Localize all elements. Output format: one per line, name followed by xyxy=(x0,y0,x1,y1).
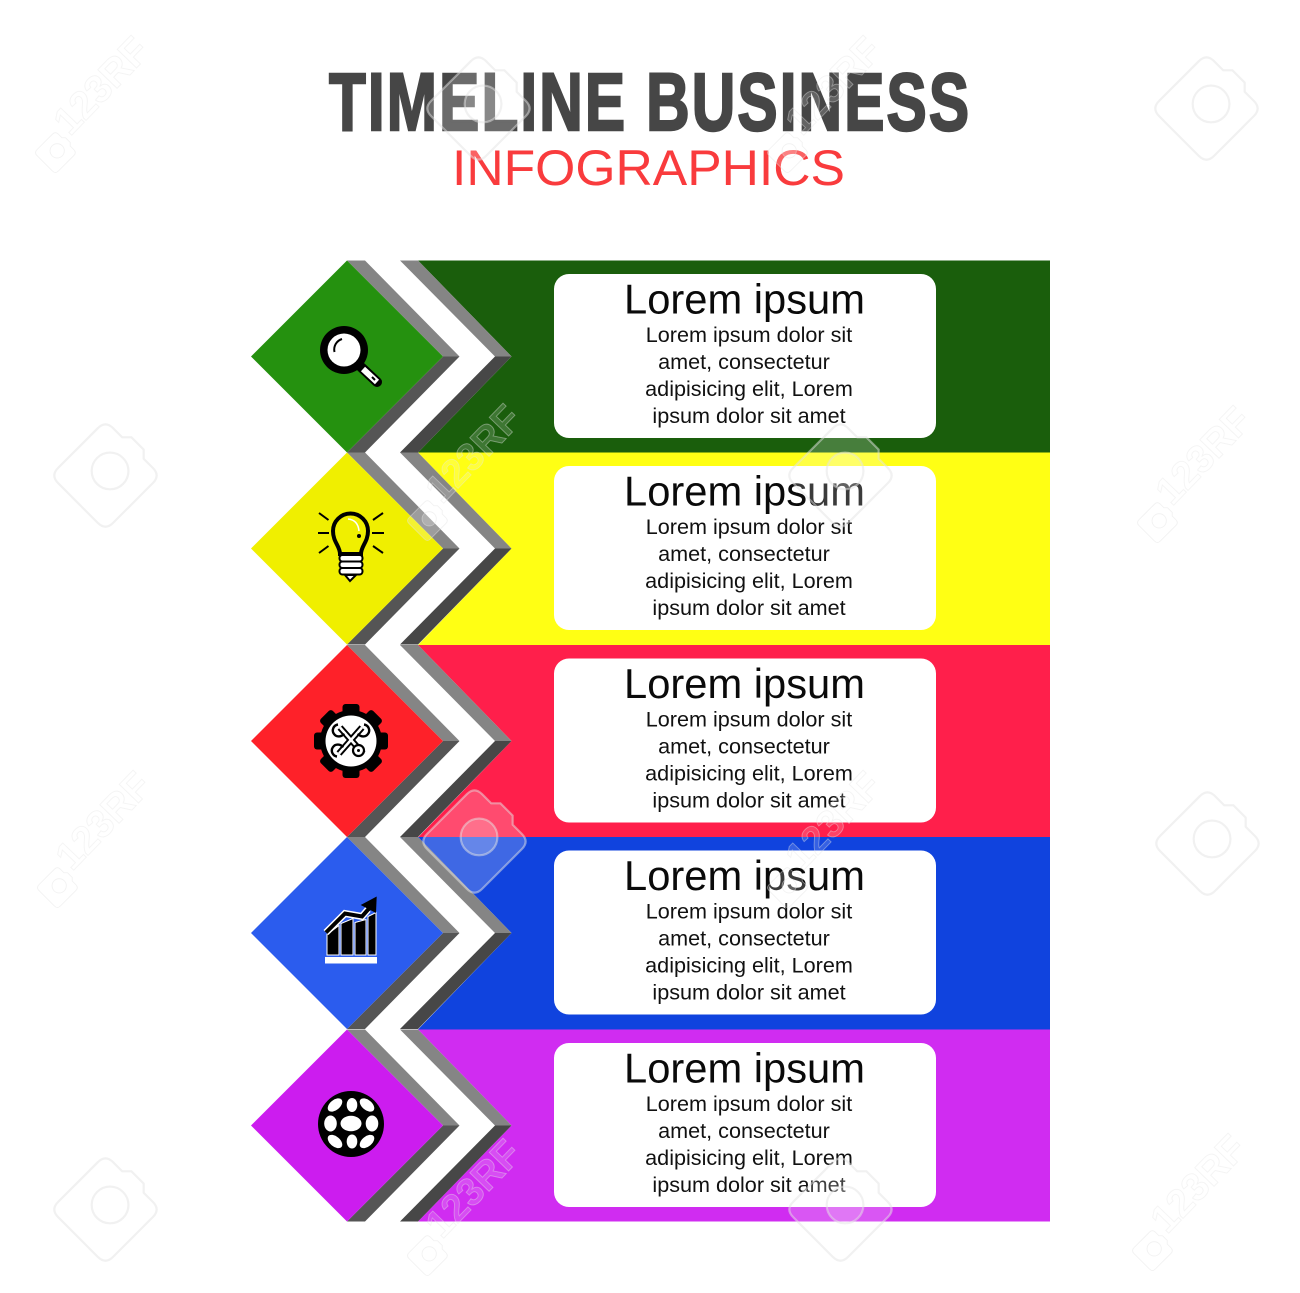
watermarks: 123RF xyxy=(1143,1127,1255,1241)
text box: Lorem ipsum xyxy=(624,468,865,514)
watermarks: 123RF xyxy=(48,764,160,878)
outer chevron xyxy=(400,452,512,644)
icon: growth chart xyxy=(325,896,377,964)
icon: dotted globe xyxy=(318,1091,384,1157)
text box: Lorem ipsum xyxy=(624,660,865,707)
text box: Lorem ipsum xyxy=(624,1044,865,1092)
watermarks: 123RF xyxy=(778,764,890,878)
text box: Lorem ipsum dolor sit xyxy=(646,322,852,347)
timeline step 5: purple xyxy=(251,1030,1050,1222)
watermarks: 123RF xyxy=(778,29,890,143)
timeline step 1: green xyxy=(251,260,1050,452)
bar xyxy=(418,452,1050,645)
inner chevron xyxy=(347,452,460,644)
inner chevron xyxy=(347,260,460,452)
outer chevron xyxy=(400,1030,512,1222)
watermarks: 123RF xyxy=(46,29,158,143)
text box: Lorem ipsum dolor sit xyxy=(646,898,852,924)
text box: ipsum dolor sit amet xyxy=(652,403,846,428)
text box: Lorem ipsum dolor sit xyxy=(646,514,852,539)
bar xyxy=(418,260,1050,452)
text box: Lorem ipsum xyxy=(624,276,865,322)
text box: adipisicing elit, Lorem xyxy=(645,952,853,978)
text box: ipsum dolor sit amet xyxy=(652,980,846,1004)
diamond xyxy=(251,837,443,1029)
heading: timeline business: TIMELINE BUSINESS xyxy=(329,57,971,148)
diamond xyxy=(251,1030,443,1222)
timeline step 3: red xyxy=(251,645,1050,838)
text box: Lorem ipsum dolor sit xyxy=(646,1091,852,1116)
outer chevron xyxy=(400,837,512,1029)
text box: amet, consectetur xyxy=(658,349,830,374)
inner chevron xyxy=(347,645,460,837)
diamond xyxy=(251,645,443,837)
title xyxy=(329,57,971,196)
text box xyxy=(554,658,936,822)
text box xyxy=(554,274,936,438)
text box: amet, consectetur xyxy=(658,541,830,566)
icon: light bulb xyxy=(318,513,384,581)
inner chevron xyxy=(347,1030,460,1222)
text box xyxy=(554,850,936,1014)
watermarks: 123RF xyxy=(418,397,530,511)
text box: Lorem ipsum dolor sit xyxy=(646,706,852,732)
icon: magnifying glass xyxy=(320,326,377,382)
timeline step 4: blue xyxy=(251,837,1050,1030)
bar xyxy=(418,645,1050,838)
icon: gear with crossed wrenches xyxy=(314,704,388,778)
text box xyxy=(554,466,936,630)
watermarks: 123RF xyxy=(418,1132,530,1246)
text box: ipsum dolor sit amet xyxy=(652,595,846,620)
diamond xyxy=(251,452,443,644)
text box: amet, consectetur xyxy=(658,926,830,950)
text box: ipsum dolor sit amet xyxy=(652,1172,846,1197)
outer chevron xyxy=(400,260,512,452)
text box: adipisicing elit, Lorem xyxy=(645,760,853,786)
subheading: infographics: INFOGRAPHICS xyxy=(452,139,845,196)
text box: amet, consectetur xyxy=(658,734,830,758)
text box: amet, consectetur xyxy=(658,1118,830,1143)
text box: Lorem ipsum xyxy=(624,852,865,899)
diamond xyxy=(251,260,443,452)
watermarks: 123RF xyxy=(1148,399,1260,513)
text box xyxy=(554,1043,936,1207)
outer chevron xyxy=(400,645,512,837)
text box: adipisicing elit, Lorem xyxy=(645,568,853,593)
inner chevron xyxy=(347,837,460,1029)
text box: adipisicing elit, Lorem xyxy=(645,1145,853,1170)
bar xyxy=(418,837,1050,1030)
bar xyxy=(418,1030,1050,1222)
text box: adipisicing elit, Lorem xyxy=(645,376,853,401)
timeline step 2: yellow xyxy=(251,452,1050,645)
text box: ipsum dolor sit amet xyxy=(652,788,846,812)
